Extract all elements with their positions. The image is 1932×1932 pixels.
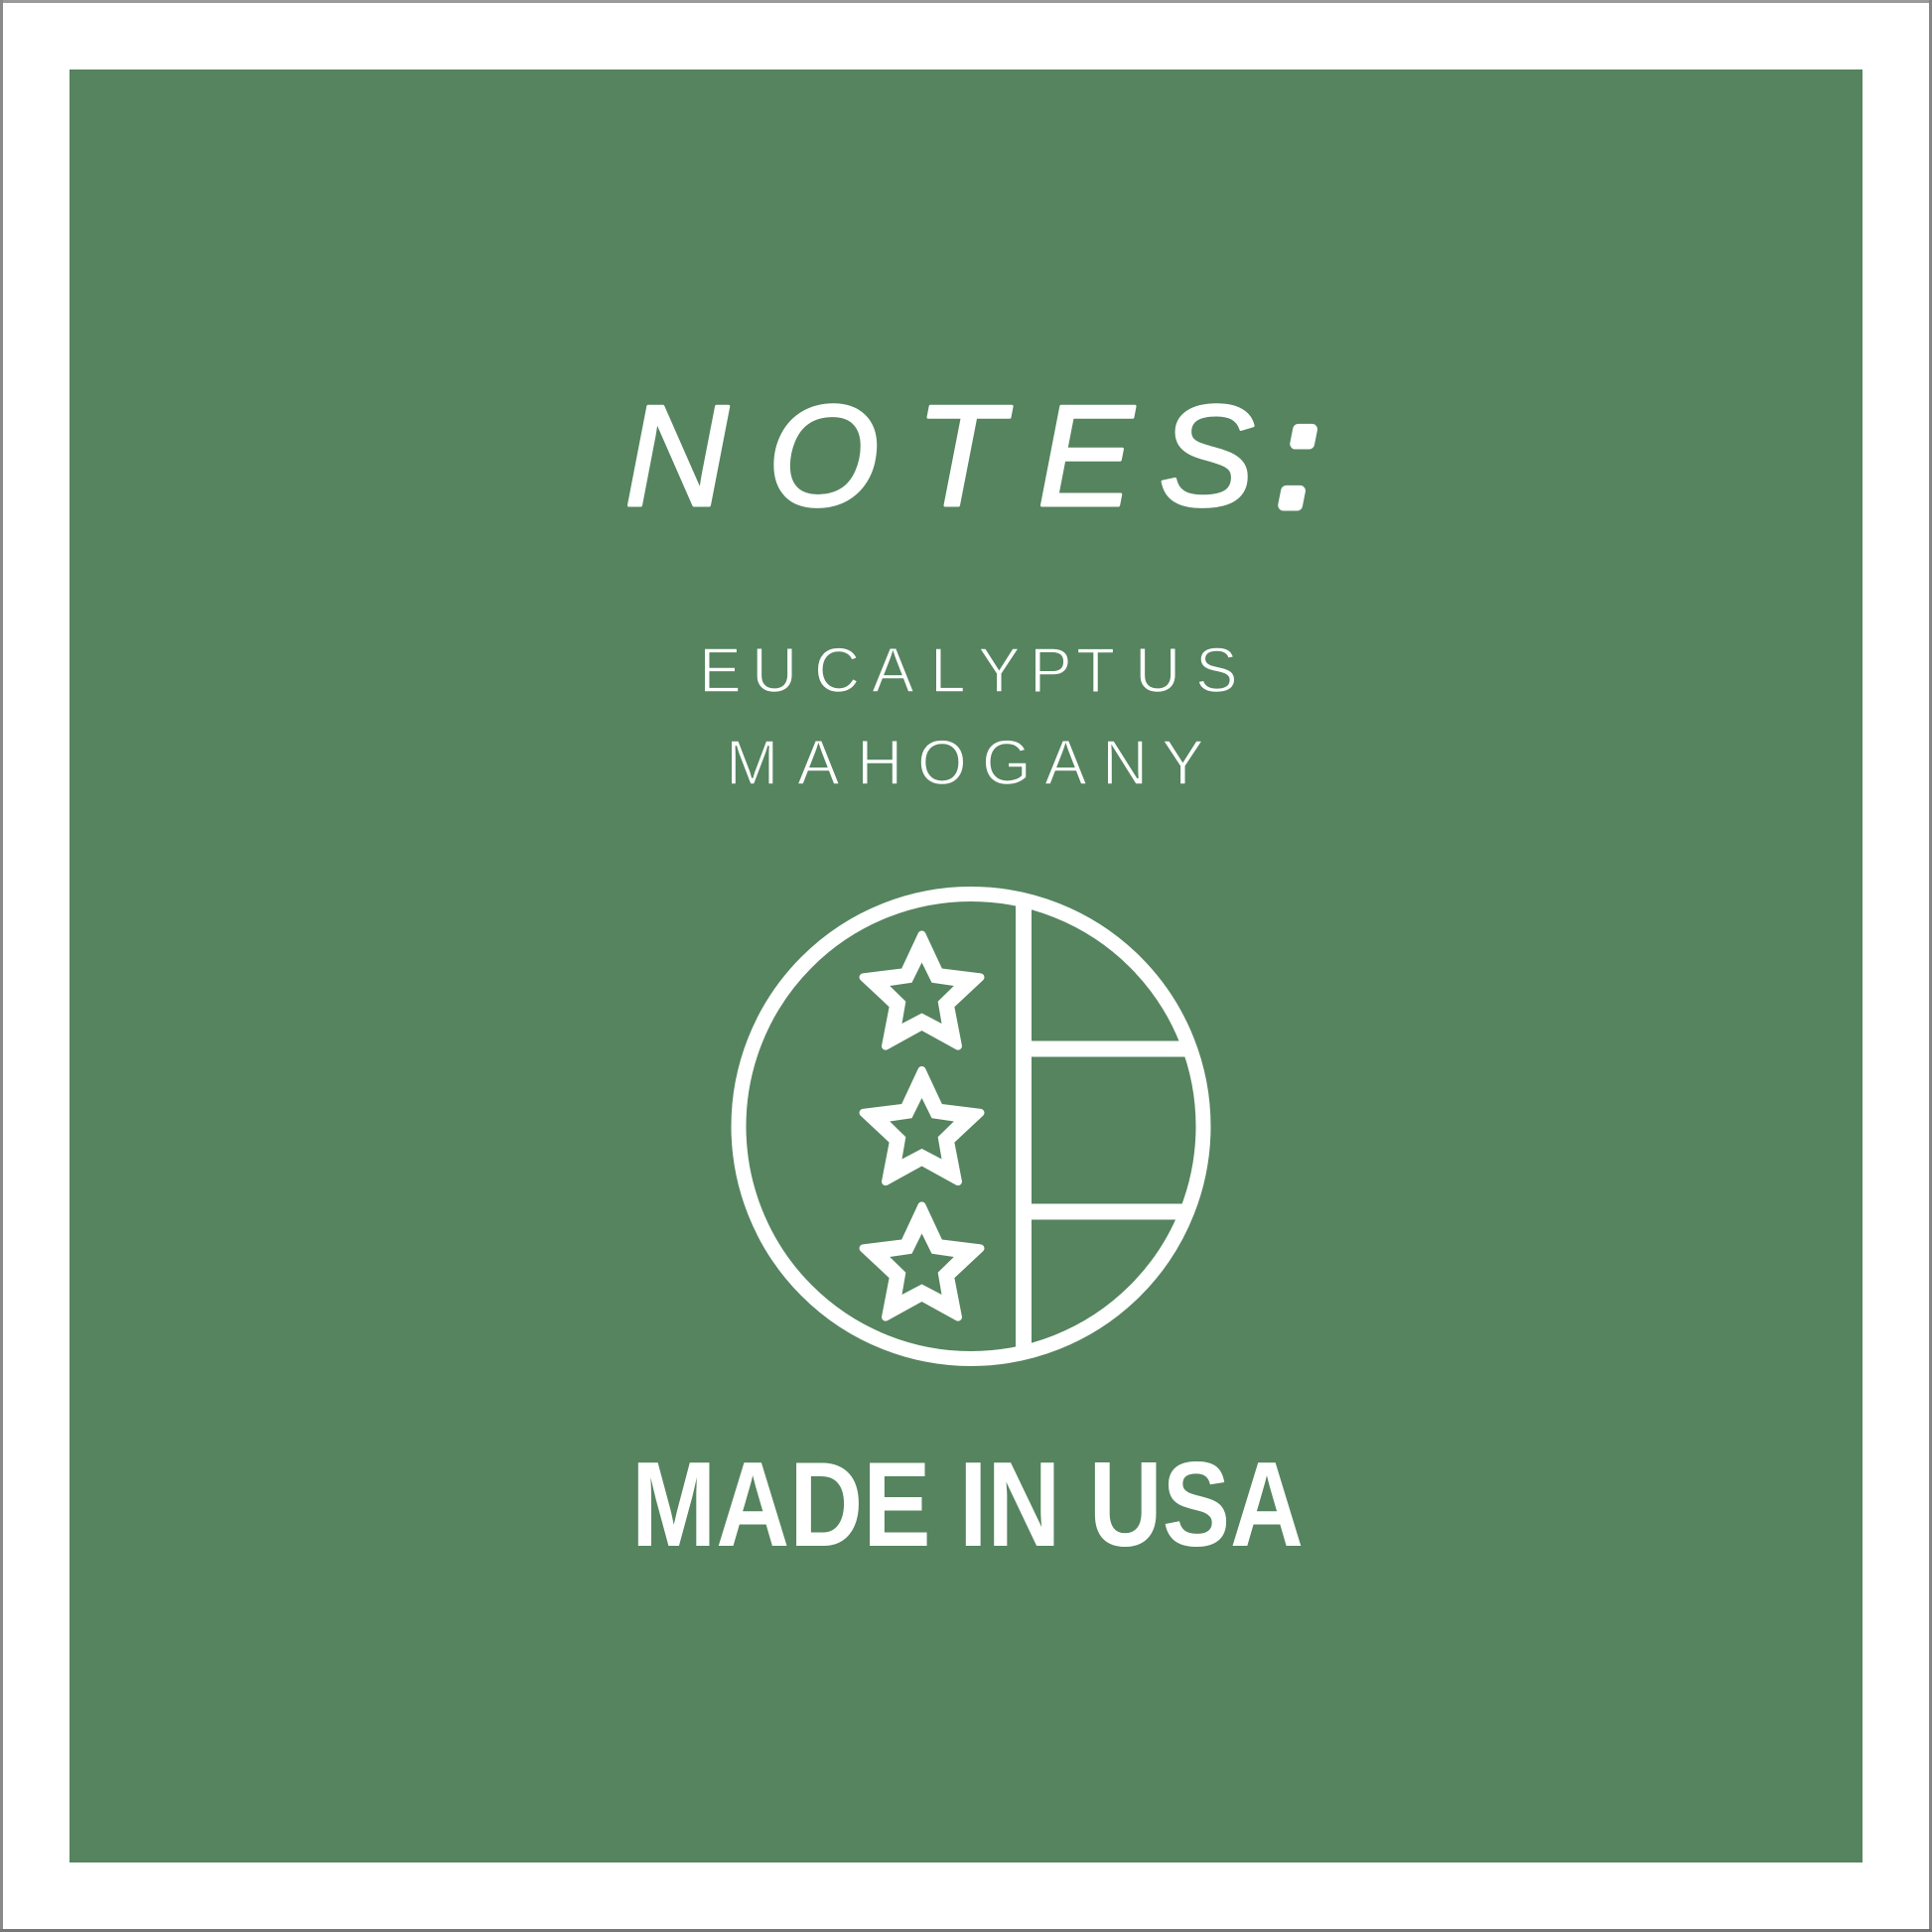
label: made in usa: MADE IN USA [631, 1437, 1304, 1572]
flag upper stripe [1024, 1040, 1186, 1056]
heading: notes: NOTES: [624, 375, 1317, 536]
note: eucalyptus: EUCALYPTUS [699, 634, 1238, 706]
flag vertical divider [1016, 898, 1032, 1354]
text block: scent notes [699, 634, 1238, 798]
badge circle [739, 894, 1203, 1358]
flag lower stripe [1024, 1203, 1186, 1219]
icon: middle star [864, 1070, 980, 1181]
note: mahogany: MAHOGANY [726, 727, 1204, 798]
icon: bottom star [864, 1205, 980, 1317]
icon: USA flag badge [739, 894, 1203, 1358]
icon: top star [864, 935, 980, 1046]
